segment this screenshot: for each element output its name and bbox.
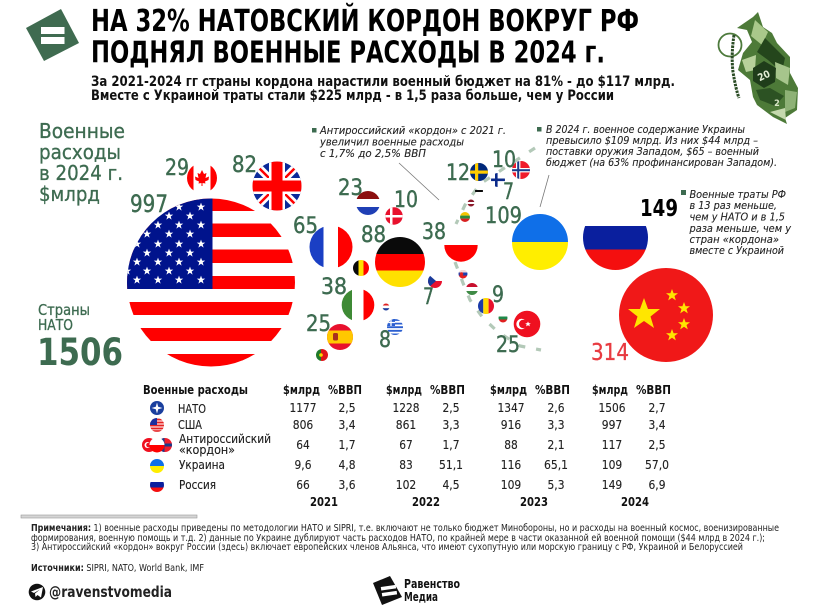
row: Russia: 66 (296, 477, 310, 492)
callout: Ukraine: поставки оружия Западом, $65 – военный (546, 145, 760, 158)
table header: $млрд (386, 383, 422, 397)
row: anti-Russian cordon: 64 (296, 437, 310, 452)
notes: 3) Антироссийский «кордон» вокруг России (здесь) включает европейских членов Альянса, что имеют сухопутную или морскую границу с РФ, Украиной и Белоруссией (31, 542, 743, 553)
flag: Latvia (468, 200, 474, 206)
notes (31, 523, 779, 553)
row: NATO (150, 400, 666, 416)
row: Ukraine (150, 459, 668, 473)
row: anti-Russian cordon: 117 (602, 437, 622, 452)
subtitle: За 2021-2024 гг страны кордона нарастили военный бюджет на 81% - до $117 млрд. (91, 74, 675, 90)
row: NATO: 1506 (598, 400, 626, 415)
flag: Czechia (428, 276, 442, 288)
title: НА 32% НАТОВСКИЙ КОРДОН ВОКРУГ РФ (91, 3, 639, 39)
callout: Russia (681, 188, 791, 257)
row: Russia: Россия (179, 477, 216, 492)
label: Germany 88: 88 (361, 223, 386, 248)
callout: anti-Russian cordon (312, 124, 506, 160)
row: anti-Russian cordon: «кордон» (179, 442, 235, 457)
callout: Ukraine: В 2024 г. военное содержание Украины (546, 123, 745, 136)
notes: Примечания: 1) военные расходы приведены по методологии НАТО и SIPRI, т.е. включают не только бюджет Минобороны, но и расходы на военный космос, военизированные (31, 523, 779, 534)
table header: $млрд (490, 383, 527, 397)
row: Ukraine: Украина (179, 457, 225, 472)
flag: Turkey (514, 311, 540, 337)
flag: Croatia (382, 304, 390, 310)
flag: Hungary (466, 283, 478, 295)
flag: Bulgaria (498, 316, 508, 322)
flag: Lithuania (460, 212, 470, 222)
row: USA: 916 (501, 417, 521, 432)
row: anti-Russian cordon: 2,1 (548, 437, 564, 452)
flag: Netherlands (356, 191, 380, 215)
label: Netherlands 23: 23 (338, 176, 363, 201)
callout: Russia: раза меньше, чем у (689, 222, 791, 235)
callout: anti-Russian cordon: Антироссийский «кордон» с 2021 г. (319, 124, 506, 137)
callout: Ukraine: превысило $109 млрд. Из них $44 млрд – (546, 134, 758, 147)
icon: money grenade (718, 12, 798, 124)
table header: %ВВП (430, 383, 465, 397)
row: Russia: 149 (602, 477, 622, 492)
label: USA 997: 997 (130, 190, 168, 218)
flag: Poland (444, 245, 478, 262)
flag: UK (252, 161, 302, 211)
row: NATO: 2,7 (648, 400, 666, 415)
flag: Canada (187, 166, 217, 190)
title (91, 3, 639, 70)
label: UK 82: 82 (232, 153, 257, 178)
logo: footer: Равенство (404, 577, 460, 591)
row: NATO: 2,5 (442, 400, 460, 415)
year labels: 2021 (310, 494, 338, 509)
row: Ukraine: 65,1 (544, 457, 568, 472)
row: USA: 3,4 (648, 417, 666, 432)
row: anti-Russian cordon: 1,7 (338, 437, 356, 452)
row: Russia: 5,3 (548, 477, 564, 492)
label: China 314: 314 (591, 340, 629, 366)
year labels (310, 494, 649, 509)
row: Russia (150, 480, 665, 492)
flag: Norway (512, 161, 530, 179)
flag: Italy (342, 290, 374, 320)
row: anti-Russian cordon: Антироссийский (179, 431, 271, 446)
row: Ukraine: 4,8 (338, 457, 356, 472)
callout: anti-Russian cordon: с 1,7% до 2,5% ВВП (320, 147, 427, 160)
flag: Ukraine (512, 214, 568, 270)
flag: China (619, 268, 713, 362)
row: anti-Russian cordon: 88 (504, 437, 518, 452)
row: NATO: 1177 (290, 400, 316, 415)
row: USA: 3,4 (338, 417, 356, 432)
flag: Slovakia (458, 270, 468, 278)
flag: Sweden (470, 163, 488, 181)
year labels: 2022 (412, 494, 440, 509)
table: military spending by year (142, 383, 671, 509)
icon: money grenade: 2 (774, 99, 780, 109)
label: Spain 25: 25 (306, 312, 331, 337)
table header (143, 383, 671, 397)
NATO total (37, 301, 123, 374)
row: Ukraine: 83 (399, 457, 413, 472)
year labels: 2024 (621, 494, 649, 509)
table header: %ВВП (328, 383, 362, 397)
logo: footer (373, 576, 460, 605)
logo: footer: Медиа (404, 590, 438, 604)
label: Ukraine 109: 109 (485, 204, 522, 229)
row: Russia: 6,9 (648, 477, 666, 492)
table header: %ВВП (535, 383, 570, 397)
flag: USA (123, 198, 295, 368)
label: Turkey 25: 25 (496, 333, 520, 358)
flag: Denmark (385, 207, 403, 225)
flag: Portugal (316, 349, 328, 361)
label: Sweden 12: 12 (446, 161, 470, 186)
flag: Finland (491, 173, 505, 187)
NATO total: 1506 (37, 331, 123, 374)
label: France 65: 65 (293, 214, 318, 239)
row: anti-Russian cordon: 2,5 (648, 437, 666, 452)
row: USA: 3,3 (442, 417, 460, 432)
row: USA: США (178, 417, 202, 432)
NATO total: Страны (38, 301, 90, 319)
label: Czechia 7: 7 (423, 285, 434, 310)
row: NATO: 2,5 (338, 400, 356, 415)
heading: military spending 2024: $млрд (39, 182, 100, 206)
row: Russia: 109 (501, 477, 521, 492)
row: NATO: 1347 (498, 400, 524, 415)
arrow: cordon callout leader (399, 163, 439, 200)
icon: money grenade: 20 (756, 69, 772, 84)
flag: Belgium (353, 260, 370, 276)
telegram handle: @ravenstvomedia (49, 583, 172, 601)
label: Poland 38: 38 (422, 220, 446, 245)
arrow: Ukraine callout leader (540, 175, 549, 207)
row: Ukraine: 116 (501, 457, 521, 472)
subtitle: Вместе с Украиной траты стали $225 млрд - в 1,5 раза больше, чем у России (91, 88, 614, 104)
label: Finland 7: 7 (503, 180, 514, 205)
flag: France (309, 225, 353, 269)
icon: telegram (29, 584, 45, 600)
row: Russia: 102 (396, 477, 416, 492)
row: USA: 861 (396, 417, 416, 432)
callout: Russia: в 13 раз меньше, (690, 199, 777, 212)
row: Russia: 4,5 (442, 477, 460, 492)
row: USA: 997 (602, 417, 622, 432)
row: Ukraine: 109 (602, 457, 622, 472)
flag: Germany (375, 237, 425, 288)
table header: $млрд (592, 383, 628, 397)
callout: Russia: стран «кордона» (690, 233, 779, 246)
flag: Estonia (475, 190, 483, 192)
subtitle (91, 74, 675, 104)
heading: military spending 2024 (39, 119, 125, 206)
flag: Spain (327, 324, 353, 350)
row: Ukraine: 9,6 (294, 457, 312, 472)
row: NATO: 2,6 (548, 400, 564, 415)
label: Canada 29: 29 (165, 156, 189, 181)
title: ПОДНЯЛ ВОЕННЫЕ РАСХОДЫ В 2024 г. (91, 36, 605, 70)
cordon dashed line (455, 148, 541, 350)
label: Russia 149: 149 (640, 196, 678, 222)
callout: Russia: чем у НАТО и в 1,5 (690, 210, 785, 224)
callout: anti-Russian cordon: увеличил военные расходы (319, 136, 464, 148)
row: anti-Russian cordon: 67 (399, 437, 413, 452)
row: NATO: НАТО (178, 401, 206, 416)
table header: $млрд (283, 383, 320, 397)
heading: military spending 2024: расходы (39, 140, 121, 164)
callout: Russia: Военные траты РФ (690, 188, 786, 201)
label: Denmark 10: 10 (394, 188, 418, 213)
heading: military spending 2024: в 2024 г. (39, 161, 123, 185)
label: Greece 8: 8 (379, 328, 391, 353)
flag: Russia (583, 226, 648, 270)
row: anti-Russian cordon (142, 434, 665, 456)
table header: Военные расходы (143, 383, 248, 397)
row: anti-Russian cordon: 1,7 (442, 437, 460, 452)
sources: Источники: SIPRI, NATO, World Bank, IMF (31, 563, 204, 574)
callout: Ukraine: бюджет (на 63% профинансирован Западом). (546, 156, 777, 169)
row: USA: 806 (293, 417, 313, 432)
row: Russia: 3,6 (338, 477, 356, 492)
callout: Ukraine (537, 123, 777, 169)
notes: формирования, военную помощь и т.д. 2) данные по Украине дублируют часть расходов НАТО, по крайней мере в части оказанной ей военной помощи ($44 млрд в 2024 г.); (31, 533, 765, 544)
callout: Russia: вместе с Украиной (690, 244, 785, 257)
logo: Ravenstvo Media emblem (26, 9, 79, 61)
label: Italy 38: 38 (321, 275, 347, 300)
row: USA: 3,3 (548, 417, 564, 432)
label: Romania 9: 9 (492, 283, 504, 308)
NATO total: НАТО (38, 316, 73, 334)
row: USA (150, 417, 666, 432)
year labels: 2023 (520, 494, 548, 509)
flag: Greece (387, 319, 403, 335)
row: Ukraine: 57,0 (645, 457, 669, 472)
heading: military spending 2024: Военные (39, 119, 125, 143)
row: NATO: 1228 (392, 400, 420, 415)
table header: %ВВП (636, 383, 671, 397)
row: Ukraine: 51,1 (439, 457, 463, 472)
flag: Romania (478, 298, 495, 314)
label: Norway 10: 10 (492, 148, 516, 173)
